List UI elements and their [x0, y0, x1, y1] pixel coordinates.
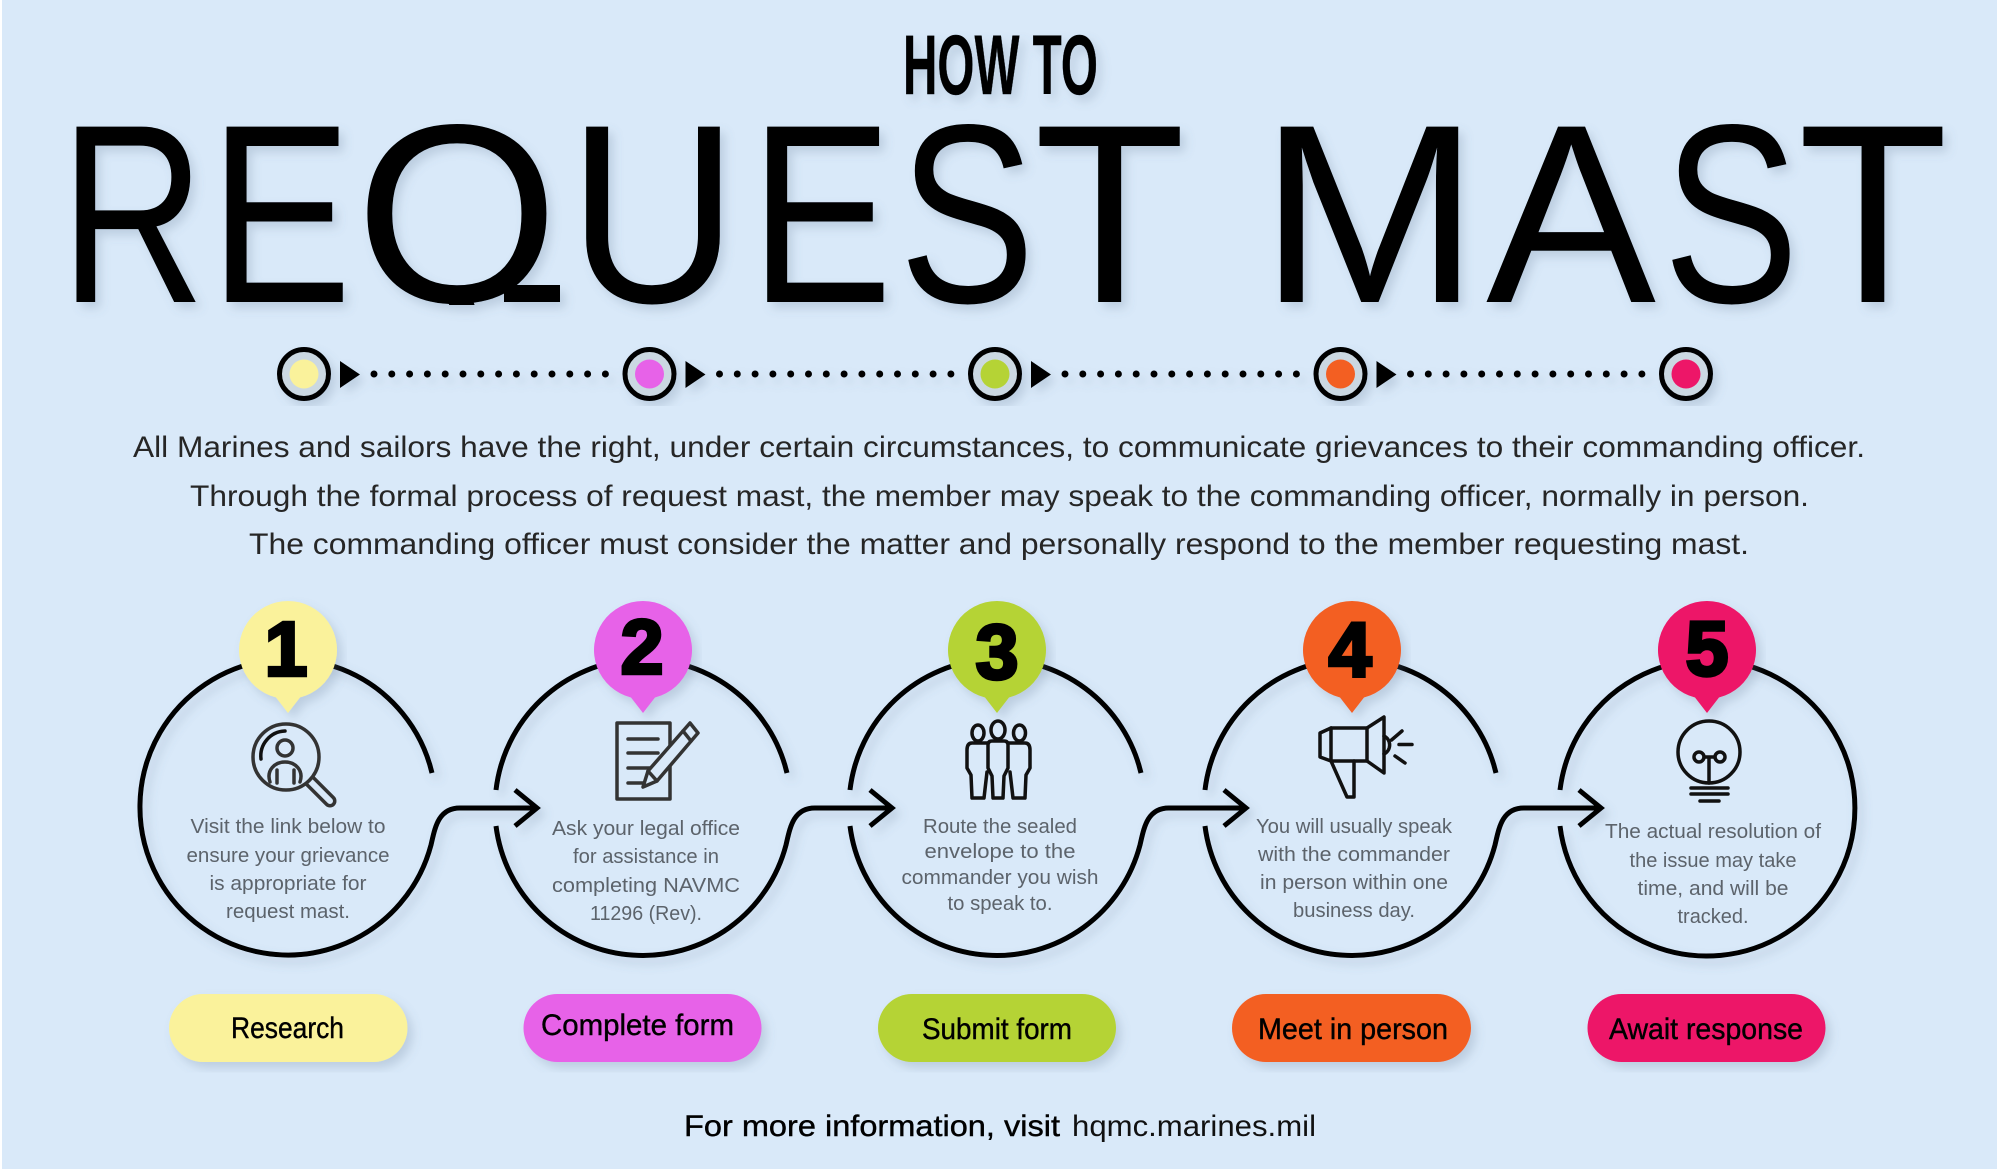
label pill: submit form: Submit form: [922, 1013, 1072, 1046]
intro text: [133, 431, 1865, 561]
step 2 text: Ask your legal office: [552, 818, 740, 840]
title: request mast: M: [1259, 72, 1480, 357]
circle 4 outline and arrow: [1205, 659, 1601, 955]
intro text: The commanding officer must consider the matter and personally respond to the member requesting mast.: [249, 528, 1749, 561]
step 5 text: the issue may take: [1630, 850, 1796, 872]
title: request mast: A: [1486, 72, 1656, 357]
step 5: [1588, 601, 1826, 1062]
label pill: meet in person: Meet in person: [1258, 1013, 1448, 1046]
step 4 text: You will usually speak: [1256, 816, 1453, 838]
step 3 text: [902, 816, 1098, 915]
title: request mast: S: [899, 72, 1035, 357]
footer link text: For more information, visit: [684, 1110, 1061, 1143]
step 3 text: Route the sealed: [923, 816, 1077, 838]
number pin 3: [948, 601, 1046, 713]
step 3 text: commander you wish: [902, 867, 1098, 889]
label pill: await response: [1588, 994, 1826, 1062]
timeline node 4: [1316, 350, 1365, 398]
step 3 text: to speak to.: [948, 893, 1052, 915]
number 4: 4: [1329, 608, 1372, 694]
subtitle: how to: HOW TO: [903, 18, 1098, 112]
number 3: 3: [976, 610, 1018, 696]
step 4 text: business day.: [1293, 900, 1415, 922]
step 5 text: [1605, 821, 1821, 928]
step 2 text: for assistance in: [573, 846, 719, 868]
circle 1 outline and arrow: [140, 659, 537, 955]
label pill: await response: Await response: [1609, 1013, 1803, 1046]
label pill: complete form: [524, 994, 762, 1062]
title: request mast: T: [1798, 72, 1948, 357]
label pill: submit form: [878, 994, 1116, 1062]
timeline arrows: [340, 361, 1396, 388]
step 4: [1232, 601, 1471, 1062]
step 1 text: ensure your grievance: [186, 845, 390, 867]
number 2: 2: [621, 604, 663, 690]
step 1 text: request mast.: [226, 901, 350, 923]
timeline node 3: [970, 350, 1020, 398]
icon: megaphone: [1320, 717, 1412, 797]
step 5 text: The actual resolution of: [1605, 821, 1821, 843]
timeline node 2: [625, 350, 674, 398]
footer link text: hqmc.marines.mil: [1072, 1110, 1316, 1143]
step 5 text: tracked.: [1678, 906, 1748, 928]
title: request mast: [76, 124, 1950, 314]
timeline node 1: [280, 350, 328, 398]
label pill: complete form: Complete form: [541, 1009, 734, 1042]
step 4 text: with the commander: [1257, 844, 1450, 866]
step 2 text: [552, 818, 740, 925]
number 1: 1: [265, 606, 307, 692]
icon: form and pencil: [617, 723, 698, 799]
step 2 text: completing NAVMC: [552, 875, 740, 897]
label pill: meet in person: [1232, 994, 1471, 1062]
title: request mast: S: [1663, 72, 1799, 357]
step 3: [878, 601, 1116, 1062]
step 4 text: in person within one: [1260, 872, 1448, 894]
label pill: research: [169, 994, 408, 1062]
circle 3 outline and arrow: [850, 659, 1246, 955]
title: request mast: T: [1034, 72, 1181, 357]
footer link text: [684, 1110, 1316, 1143]
timeline node 5: [1662, 350, 1710, 398]
label pill: research: Research: [231, 1012, 344, 1045]
timeline dotted connectors: [374, 370, 1648, 378]
flow line connecting circles: [140, 659, 1855, 956]
step 5 text: time, and will be: [1638, 878, 1788, 900]
icon: magnifier with person: [253, 724, 330, 801]
step 4 text: [1256, 816, 1453, 922]
number pin 5: [1658, 601, 1756, 713]
title: request mast: R: [60, 72, 205, 357]
intro text: All Marines and sailors have the right, under certain circumstances, to communicate grievances to their commanding officer.: [133, 431, 1865, 464]
step 1 text: Visit the link below to: [190, 816, 386, 838]
step 1 text: [186, 816, 390, 923]
number pin 2: [594, 601, 692, 713]
title: request mast: Q: [355, 72, 559, 357]
number 5: 5: [1686, 606, 1728, 692]
title: request mast: E: [209, 72, 352, 357]
icon: light bulb: [1678, 721, 1740, 801]
circle 2 outline and arrow: [496, 659, 892, 955]
step 1 text: is appropriate for: [210, 873, 367, 895]
step 1: [169, 601, 408, 1062]
number pin 1: [239, 601, 337, 713]
step 2 text: 11296 (Rev).: [590, 903, 702, 925]
circle 5 outline: [1560, 660, 1855, 956]
step 2: [524, 601, 762, 1062]
intro text: Through the formal process of request mast, the member may speak to the commanding officer, normally in person.: [190, 480, 1809, 513]
title: request mast: E: [750, 72, 893, 357]
title: request mast: U: [568, 72, 738, 357]
number pin 4: [1303, 601, 1401, 713]
progress timeline: [280, 350, 1710, 398]
step 3 text: envelope to the: [924, 841, 1076, 863]
icon: three people: [967, 721, 1030, 798]
